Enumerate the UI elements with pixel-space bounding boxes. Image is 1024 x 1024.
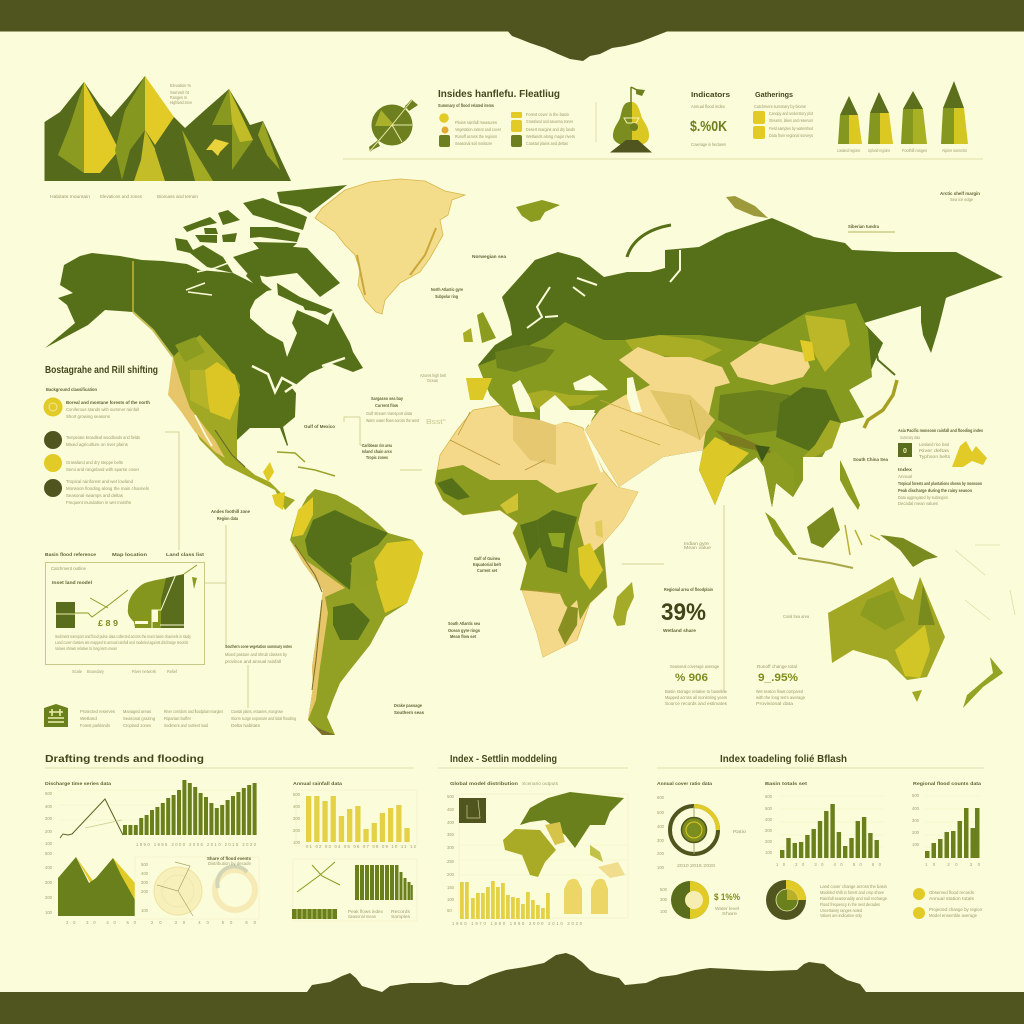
text: bottom notes row: Managed areas (123, 709, 152, 714)
chart: regional bars: 500 (912, 793, 920, 798)
chart: donut: 500 (660, 887, 668, 892)
callout: Asia-Pacific note (853, 428, 987, 506)
chart: discharge bars and line (45, 780, 258, 847)
stat: lower pair (665, 664, 805, 706)
chart: ring gauge: 500 (657, 810, 665, 815)
callout: Asia-Pacific note: Asia Pacific monsoon rainfall and flooding index (898, 428, 983, 433)
chart: mini map with bars: 250 (447, 859, 455, 864)
chart: basin bars: 10 20 30 40 50 60 (776, 862, 882, 867)
chart: yellow bars: 300 (293, 816, 301, 821)
chart: ring gauge: 2010 2015 2020 (677, 863, 716, 868)
chart: basin bars: 200 (765, 839, 773, 844)
text: pie notes (820, 884, 887, 918)
panel: basin inset: Inset land model (52, 580, 92, 585)
section: land cover charts (657, 754, 984, 920)
panel: basin inset: Land class list (166, 552, 205, 557)
heading: top legend: Insides hanflefu. Fleatliug (438, 89, 560, 100)
bottom torn band (0, 953, 1024, 1024)
chart: mini map with bars: 400 (447, 820, 455, 825)
chart: mini map with bars: 1960 1970 1980 1990 2000 2010 2020 (452, 921, 583, 926)
legend: top list: Vegetation extent and cover (455, 127, 501, 132)
panel: basin inset: Scale (72, 669, 83, 674)
stat: lower pair: Basin storage relative to baseline (665, 689, 727, 694)
legend: left column: Background classification (46, 387, 97, 392)
chart: yellow bars: 100 (293, 840, 301, 845)
chart: pale circles: 500 (141, 862, 149, 867)
callout: Asia-Pacific note: 0 (903, 448, 907, 455)
panel: basin inset: Relief (167, 669, 178, 674)
labels: southern ocean callouts: Drake passage (394, 703, 422, 708)
labels: Atlantic callouts: North Atlantic gyre (431, 287, 463, 292)
panel: basin inset: Basin flood reference (45, 552, 96, 557)
chart: regional bars (912, 793, 981, 867)
chart: regional bars: 200 (912, 830, 920, 835)
stat: Indian Ocean: Mean value (684, 545, 712, 550)
legend: left column: Seasonal swamps and deltas (66, 493, 124, 498)
chart: ring gauge: 200 (657, 851, 665, 856)
chart: small line and green bars: Seasonal mean (348, 914, 377, 919)
legend: top list: Summary of flood related items (438, 103, 494, 108)
section: drafting trends: Annual rainfall data (293, 781, 342, 786)
map: Europe islands (463, 196, 895, 343)
chart: mini map with bars: 350 (447, 832, 455, 837)
labels: Eurasia callouts: Siberian tundra (848, 224, 879, 229)
chart: pale circles: Distribution by decade (208, 861, 252, 866)
mountain notes (50, 83, 198, 199)
legend: left column: Monsoon flooding along the main channels (66, 486, 150, 491)
chart: pale circles: 20 30 40 50 60 (151, 920, 257, 925)
chart: basin bars: 600 (765, 794, 773, 799)
stat: lower pair: Provisional data (756, 701, 794, 706)
stat: lower pair: Runoff change total (757, 664, 797, 669)
panel: basin inset: £ 8 9 (98, 619, 119, 628)
chart: yellow bars (293, 790, 417, 849)
chart: yellow bars: 01 02 03 04 05 06 07 08 09 10 11 12 (306, 844, 417, 849)
mountain notes: Summit ht (170, 90, 190, 95)
stat: lower pair: 9_.95% (758, 672, 798, 684)
map: Japan (864, 380, 897, 428)
section: drafting trends (45, 754, 417, 925)
legend: bottom right dots: Model ensemble average (929, 913, 977, 918)
stat: top centre: $.%0K (690, 118, 727, 135)
stat: top centre (690, 90, 730, 147)
stat: lower pair: Mapped across all monitoring years (665, 695, 728, 700)
legend: top right: Streams, lakes and reservoir (769, 118, 813, 123)
chart: pie (766, 880, 806, 920)
chart: four spires: Alpine summits (942, 148, 967, 153)
labels: Atlantic callouts: Bsst° (426, 418, 446, 426)
text: bottom notes row: Forest parklands (80, 723, 111, 728)
panel: basin inset: Catchment outline (51, 566, 86, 571)
callout: Asia-Pacific note: Decadal mean values (898, 501, 939, 506)
text: bottom notes row (80, 709, 296, 728)
text: bottom notes row: Delta habitats (231, 723, 261, 728)
legend: left column: Temperate broadleaf woodlands and fields (66, 435, 141, 440)
legend: top list: Wetlands along major rivers (526, 134, 576, 139)
chart: area: 400 (45, 865, 53, 870)
illustration: mountains (44, 76, 291, 181)
legend: left column: Mixed agriculture on river plains (66, 442, 129, 447)
chart: pale circles: 200 (141, 889, 149, 894)
labels: South America callouts: Andes foothill zone (211, 509, 250, 514)
labels: Atlantic callouts: Gulf of Mexico (304, 424, 335, 429)
stat: lower pair: % 906 (675, 672, 708, 684)
map: Africa (435, 403, 638, 657)
section: land cover charts: Regional flood counts data (913, 781, 981, 786)
labels: Eurasia callouts: Sea ice edge (950, 197, 973, 202)
chart: four spires: Upland regions (868, 148, 890, 153)
chart: mini map with bars: 500 (447, 794, 455, 799)
labels: Atlantic callouts: Sargasso sea bay (371, 396, 403, 401)
labels: Eurasia callouts: Norwegian sea (472, 254, 506, 259)
legend: left column: Short growing seasons (66, 414, 111, 419)
heading: left column: Bostagrahe and Rill shifting (45, 365, 158, 376)
callout: Asia-Pacific note: Peak discharge during the rainy season (898, 488, 972, 493)
map: Southeast Asia (765, 460, 1015, 620)
stat: top centre: Indicators (691, 90, 730, 99)
chart: ring gauge: 300 (657, 838, 665, 843)
labels: southern ocean callouts: South Atlantic sea (448, 621, 480, 626)
section: global modelling: Index - Settlin moddeling (450, 754, 557, 765)
chart: pale circles: Share of flood events (207, 856, 251, 861)
chart: discharge bars and line: 500 (45, 791, 53, 796)
chart: area (45, 851, 137, 925)
section: global modelling (438, 754, 628, 926)
stat: Indian Ocean: Wetland share (663, 628, 696, 633)
labels: southern ocean callouts (394, 556, 501, 715)
chart: area: 100 (45, 910, 53, 915)
labels: Eurasia callouts: Arctic shelf margin (940, 191, 980, 196)
text: bottom notes row: Wetland (80, 716, 97, 721)
labels: Atlantic callouts: Ocean (427, 378, 438, 383)
text: bottom notes row: Riparian buffer (164, 716, 191, 721)
panel: basin inset: Land cover classes are mapped to annual rainfall and modeled against discharge records (55, 640, 189, 645)
section: global modelling: Scenario outputs (522, 781, 558, 786)
panel: basin inset: Sediment transport and flood pulse data collected across the main basin channels in study (55, 634, 192, 639)
labels: Atlantic callouts: Island chain arcs (362, 449, 392, 454)
chart: ring gauge (657, 795, 747, 870)
section: global modelling: Global model distribution (450, 781, 518, 786)
map: Tasmania (912, 690, 922, 702)
text: pie notes: Modeled shift in forest and crop share (820, 890, 884, 895)
legend: top list: Coastal plains and deltas (526, 141, 569, 146)
callout: Asia-Pacific note: River deltas (919, 448, 950, 453)
chart: area: 300 (45, 880, 53, 885)
chart: ring gauge: 100 (657, 865, 665, 870)
chart: area: 20 30 40 50 (66, 920, 137, 925)
legend: left column: Tropical rainforest and wet lowland (66, 479, 133, 484)
chart: discharge bars and line: 400 (45, 804, 53, 809)
stat: Indian Ocean: Coral Sea area (783, 614, 809, 619)
chart: discharge bars and line: 1990 1995 2000 2005 2010 2015 2020 (136, 842, 257, 847)
callout: Asia-Pacific note: Annual (898, 474, 912, 479)
chart: discharge bars and line: 100 (45, 841, 53, 846)
stat: lower pair: Wet season flows compared (756, 689, 803, 694)
panel: basin inset: Values shown relative to long term mean (55, 646, 117, 651)
labels: South America callouts: Southern cone vegetation summary notes (225, 644, 292, 649)
chart: four spires (837, 81, 968, 153)
chart: small line and green bars (292, 859, 417, 921)
callout: Asia-Pacific note: Data aggregated by subregion (898, 495, 948, 500)
labels: southern ocean callouts: Ocean gyre rings (448, 628, 480, 633)
text: bottom notes row: Coastal plains, estuaries, mangrove (231, 709, 283, 714)
chart: small line and green bars: Peak flows index (348, 909, 384, 914)
section: drafting trends: Discharge time series data (45, 781, 111, 786)
arctic archipelago (175, 185, 347, 315)
chart: basin bars: 400 (765, 817, 773, 822)
text: bottom notes row: Seasonal grazing (123, 716, 155, 721)
legend: top list: Forest cover in the basin (526, 112, 569, 117)
callout: Asia-Pacific note: Tropical forests and plantations shown by monsoon (898, 481, 982, 486)
text: pie notes: Values are indicative only (820, 913, 863, 918)
chart: basin bars: 100 (765, 850, 773, 855)
map: Eurasia (466, 218, 1003, 507)
legend: top right: Gatherings (755, 90, 793, 99)
chart: donut (660, 881, 740, 919)
chart: area: 200 (45, 895, 53, 900)
chart: four spires: Lowland regions (837, 148, 860, 153)
legend: left column: Grassland and dry steppe belts (66, 460, 124, 465)
chart: ring gauge: 400 (657, 824, 665, 829)
chart: mini map with bars: 100 (447, 897, 455, 902)
callout: Asia-Pacific note: Typhoon belts (919, 454, 951, 459)
map: Madagascar (613, 582, 634, 626)
labels: Atlantic callouts: Gulf stream transport data (366, 411, 412, 416)
text: bottom notes row: River corridors and floodplain margins (164, 709, 224, 714)
legend: top list: Desert margins and dry lands (526, 127, 576, 132)
legend: top right (753, 90, 814, 139)
labels: southern ocean callouts: Gulf of Guinea (474, 556, 500, 561)
panel: basin inset: Boundary (87, 669, 105, 674)
chart: area: 500 (45, 851, 53, 856)
top torn band (0, 0, 1024, 61)
legend: top list: Plains rainfall measures (455, 120, 498, 125)
legend: top list (438, 103, 576, 147)
chart: donut: $ 1%% (714, 892, 740, 902)
stat: top centre: Annual flood index (691, 104, 726, 109)
section: land cover charts: Annual cover ratio data (657, 781, 712, 786)
callout: Asia-Pacific note: Index (898, 467, 912, 472)
stat: top centre: Coverage in hectares (691, 142, 727, 147)
text: bottom notes row: Protected reserves (80, 709, 116, 714)
icon: crossed pie (369, 100, 418, 151)
stat: lower pair: with the long term average (756, 695, 805, 700)
chart: regional bars: 400 (912, 806, 920, 811)
chart: donut: 300 (660, 897, 668, 902)
callout: Asia-Pacific note: Summary data (900, 435, 920, 440)
labels: Atlantic callouts: Warm water flows across the west (366, 418, 420, 423)
labels: Eurasia callouts (472, 191, 980, 259)
legend: left column: Frequent inundation in wet months (66, 500, 132, 505)
labels: southern ocean callouts: Current set (477, 568, 497, 573)
labels: Atlantic callouts: Subpolar ring (435, 294, 458, 299)
stat: lower pair: Seasonal coverage average (670, 664, 719, 669)
mountain notes: Habitats mountain (50, 194, 90, 199)
map: Kamchatka (921, 298, 946, 353)
chart: yellow bars: 400 (293, 804, 301, 809)
chart: mini map with bars: 200 (447, 872, 455, 877)
text: bottom notes row: Cropland zones (123, 723, 152, 728)
icon: building badge (44, 704, 68, 727)
labels: South America callouts: Mixed pasture and shrub classes by (225, 652, 288, 657)
text: pie notes: Uncertainty ranges noted (820, 908, 862, 913)
chart: small line and green bars: Samples (391, 914, 410, 919)
section: land cover charts: Index toadeling folié Bflash (720, 754, 847, 765)
section: land cover charts: Basin totals set (765, 781, 808, 786)
labels: Atlantic callouts: Caribbean rim area (362, 443, 392, 448)
chart: basin bars: 500 (765, 806, 773, 811)
chart: four spires: Foothill ranges (902, 148, 927, 153)
labels: Atlantic callouts: Tropic zones (366, 455, 388, 460)
section: drafting trends: Drafting trends and flooding (45, 754, 204, 765)
chart: pale circles: 300 (141, 880, 149, 885)
mountain notes: Ranges m (170, 95, 187, 100)
labels: southern ocean callouts: Mean flow set (450, 634, 476, 639)
chart: mini map with bars: 450 (447, 807, 455, 812)
legend: top list: Grassland and savanna zones (526, 119, 574, 124)
mountain notes: Elevation % (170, 83, 191, 88)
callout: Asia-Pacific note: South China Sea (853, 457, 888, 462)
text: pie notes: Land cover change across the basin (820, 884, 887, 889)
stat: Indian Ocean (622, 505, 809, 693)
stat: Indian Ocean: Regional area of floodplain (664, 587, 713, 592)
legend: top right: Canopy and understory plot (769, 111, 814, 116)
labels: southern ocean callouts: Equatorial belt (473, 562, 501, 567)
chart: regional bars: 300 (912, 818, 920, 823)
text: pie notes: Flood frequency in the next decades (820, 902, 881, 907)
labels: South America callouts (211, 509, 292, 664)
map: Greenland (315, 179, 465, 314)
legend: top list: Runoff across the regions (455, 134, 498, 139)
chart: pale circles (135, 856, 259, 925)
map: Australia (828, 577, 945, 680)
stat: Indian Ocean: Indian gyre (684, 541, 709, 546)
labels: southern ocean callouts: Southern seas (394, 710, 424, 715)
chart: pale circles: 400 (141, 871, 149, 876)
mountain notes: Biomass and terrain (157, 194, 198, 199)
legend: top right: Data from regional surveys (769, 133, 814, 138)
labels: Atlantic callouts: Azores high belt (420, 373, 447, 378)
panel: basin inset: Map location (112, 552, 147, 557)
chart: donut: Share (722, 911, 738, 916)
chart: donut: 100 (660, 909, 668, 914)
map: North America (45, 185, 363, 510)
stat: Indian Ocean: 39% (661, 599, 706, 626)
chart: basin bars (765, 794, 884, 867)
chart: yellow bars: 500 (293, 792, 301, 797)
stat: lower pair: Source records and estimates (665, 701, 728, 706)
panel: basin inset: River network (132, 669, 157, 674)
chart: mini map with bars: 300 (447, 845, 455, 850)
chart: mini map with bars (447, 792, 628, 926)
panel: basin inset (45, 552, 205, 674)
legend: left column (44, 387, 150, 505)
mountain notes: Elevations and zones (100, 194, 143, 199)
labels: South America callouts: Region data (217, 516, 238, 521)
chart: regional bars: 10 20 30 (925, 862, 981, 867)
text: bottom notes row: Storm surge exposure and tidal flooding (231, 716, 296, 721)
chart: pale circles: 100 (141, 908, 149, 913)
chart: basin bars: 300 (765, 828, 773, 833)
chart: ring gauge: Ratio (733, 829, 747, 834)
text: bottom notes row: Sediment and nutrient load (164, 723, 208, 728)
labels: South America callouts: province and annual rainfall (225, 659, 281, 664)
chart: mini map with bars: 150 (447, 885, 455, 890)
legend: left column: Boreal and montane forests of the north (66, 400, 150, 405)
labels: Atlantic callouts (304, 287, 463, 470)
text: pie notes: Rainfall seasonality and soil recharge (820, 896, 887, 901)
callout: Asia-Pacific note: Lowland rice land (919, 442, 949, 447)
legend: top right: Catchment summary by biome (754, 104, 806, 109)
chart: regional bars: 100 (912, 842, 920, 847)
chart: discharge bars and line: 300 (45, 816, 53, 821)
legend: left column: Semi arid rangeland with sparse cover (66, 467, 139, 472)
legend: bottom right dots: Observed flood records (929, 890, 975, 895)
chart: donut: Water level (715, 906, 739, 911)
chart: small line and green bars: Records (391, 909, 410, 914)
legend: bottom right dots: Annual station totals (929, 896, 975, 901)
map: New Zealand (963, 657, 1003, 708)
legend: left column: Coniferous stands with summer rainfall (66, 407, 139, 412)
labels: Atlantic callouts: Current flow (375, 403, 398, 408)
mountain notes: Highland zone (170, 100, 192, 105)
icon: pear (610, 87, 652, 152)
legend: bottom right dots (913, 888, 982, 919)
chart: yellow bars: 200 (293, 828, 301, 833)
legend: top list: Seasonal soil moisture (455, 141, 492, 146)
legend: top right: Field samples by watershed (769, 126, 813, 131)
map: South America (290, 489, 423, 735)
chart: discharge bars and line: 200 (45, 829, 53, 834)
legend: bottom right dots: Projected change by region (929, 907, 982, 912)
chart: mini map with bars: 50 (447, 908, 452, 913)
chart: ring gauge: 600 (657, 795, 665, 800)
